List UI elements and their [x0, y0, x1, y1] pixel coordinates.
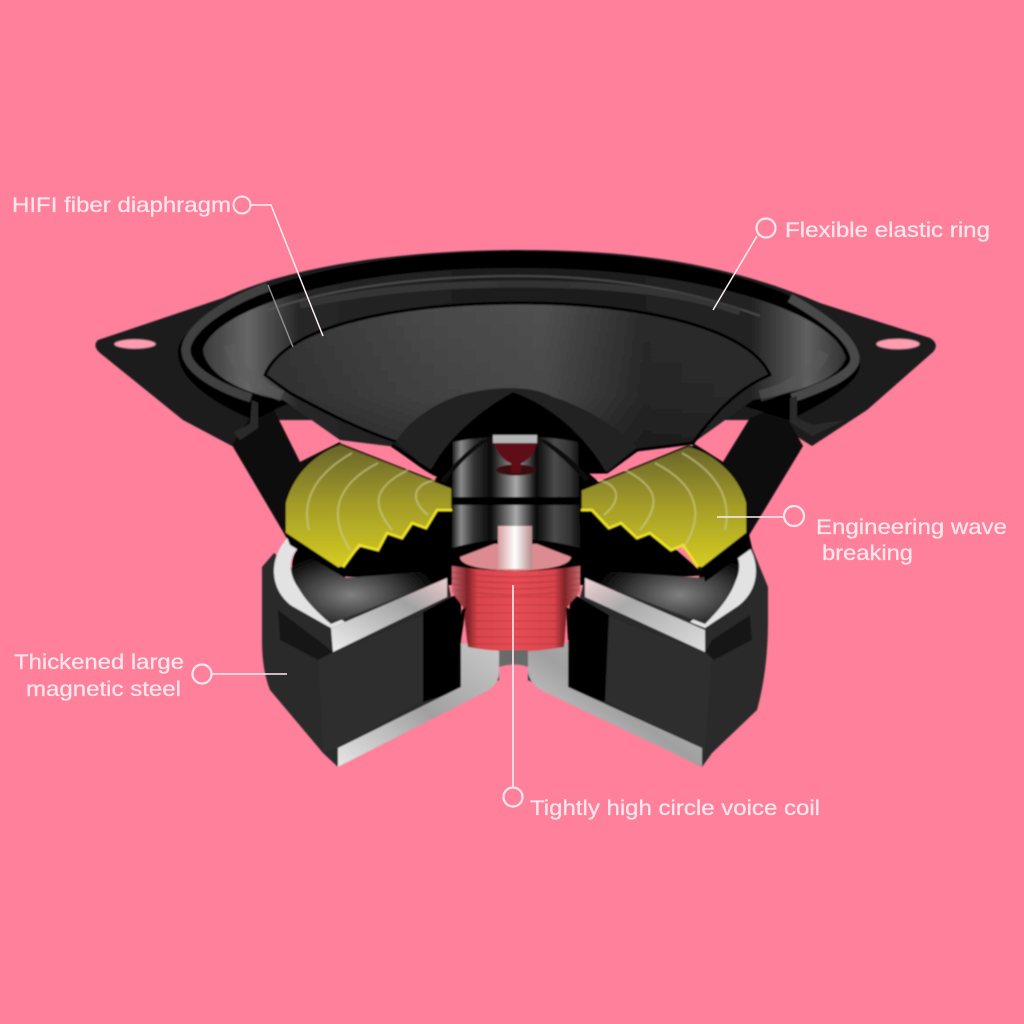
coil shadow right — [566, 607, 574, 640]
diaphragm cone surface — [265, 303, 770, 473]
icon: right mounting hole — [876, 338, 920, 350]
callout: Tightly high circle voice coil — [504, 585, 820, 820]
callout: HIFI fiber diaphragm — [12, 193, 323, 347]
left top plate — [331, 578, 447, 652]
left ring cross-section — [234, 400, 258, 440]
dust cap inner — [430, 392, 606, 472]
spider: right yellow wave — [581, 446, 747, 568]
marker — [192, 664, 212, 684]
marker — [756, 218, 776, 238]
left support arm — [232, 405, 345, 580]
label line 2: magnetic steel — [26, 677, 181, 701]
surround highlight bands — [268, 276, 760, 316]
right chrome bowl — [585, 538, 756, 628]
marker — [234, 196, 250, 214]
dust cap arch — [396, 388, 637, 472]
surround outer ring left — [186, 287, 268, 398]
surround outer ring right — [790, 298, 855, 398]
pole base — [499, 650, 528, 667]
marker — [784, 506, 804, 526]
label line 1: Engineering wave — [816, 515, 1007, 539]
icon: left mounting hole — [114, 339, 156, 349]
surround roll and cone body — [203, 268, 846, 473]
label: HIFI fiber diaphragm — [12, 193, 231, 217]
label line 1: Thickened large — [14, 650, 184, 674]
center pole column — [440, 435, 590, 548]
spider underside shadow left — [284, 530, 345, 578]
dark chamber behind spider — [330, 470, 705, 585]
leader line — [512, 585, 514, 787]
right support arm — [690, 405, 803, 585]
right ring cross-section — [790, 396, 845, 436]
left chrome bowl — [274, 538, 447, 628]
leader line — [251, 205, 323, 336]
right bottom plate — [528, 643, 702, 767]
marker — [504, 788, 522, 806]
frame plate — [95, 250, 936, 446]
label line 2: breaking — [822, 541, 913, 565]
right top plate — [585, 578, 705, 652]
top cap — [493, 435, 537, 443]
label: Flexible elastic ring — [785, 218, 990, 242]
callout: Thickened large magnetic steel — [14, 650, 287, 701]
speaker illustration — [95, 250, 936, 767]
spider underside shadow right — [700, 530, 752, 582]
secondary leader line — [268, 285, 293, 347]
leader line — [713, 236, 757, 310]
magnetic steel: left block — [262, 553, 499, 767]
coil rod — [498, 526, 532, 569]
leader line — [717, 516, 784, 518]
callout: Flexible elastic ring — [713, 218, 990, 310]
red inner detail — [495, 443, 537, 464]
spider: left yellow wave — [285, 444, 452, 568]
coil shadow left — [456, 607, 466, 640]
rim black body — [178, 251, 860, 420]
coil top disc — [460, 544, 571, 571]
voice coil — [452, 566, 580, 652]
label: Tightly high circle voice coil — [530, 796, 820, 820]
magnetic steel: right block — [528, 543, 768, 767]
leader line — [212, 673, 287, 675]
left bottom plate — [338, 643, 499, 767]
arch inner edge — [392, 445, 440, 476]
callout: Engineering wave breaking — [717, 506, 1007, 565]
